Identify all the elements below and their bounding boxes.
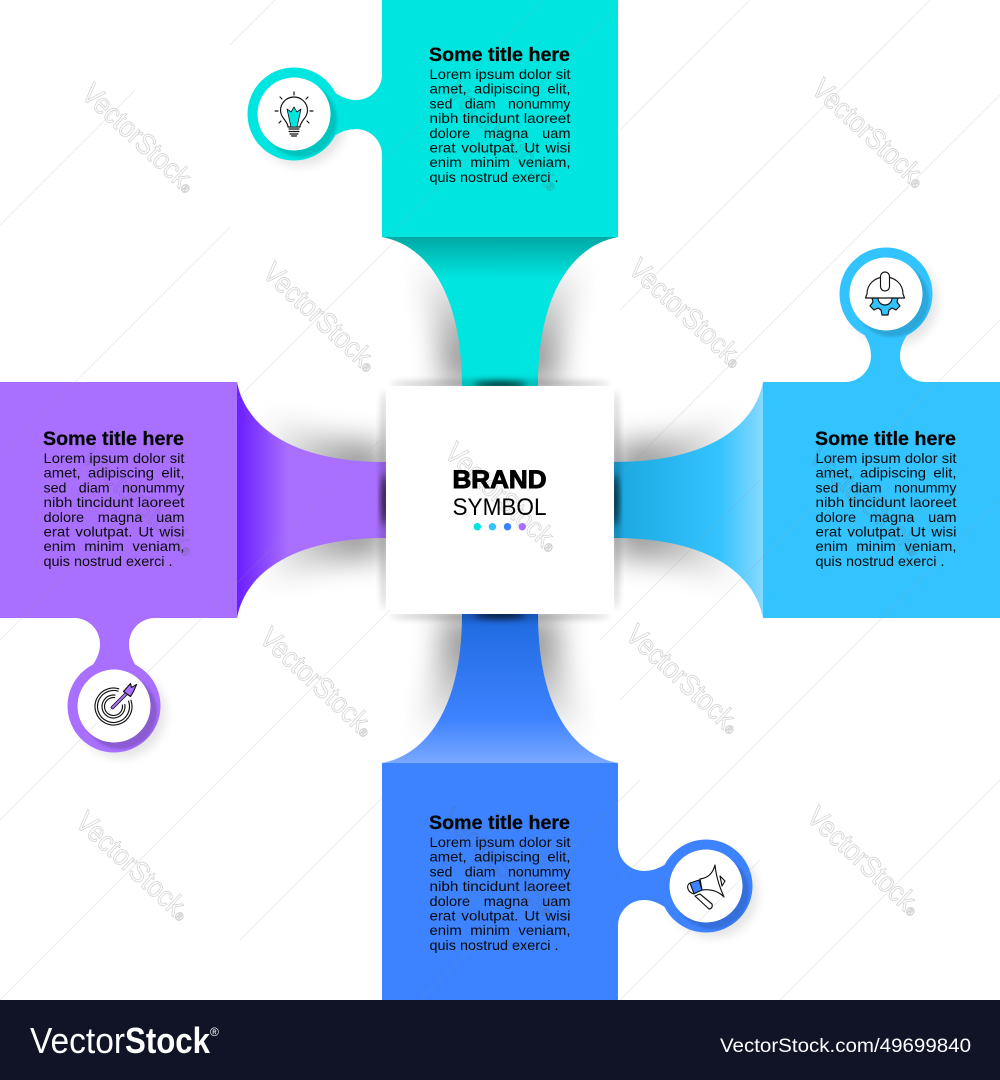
panel: left purple (0, 382, 386, 752)
text: right panel (815, 429, 957, 569)
watermark stamps on white: VectorStock® (800, 801, 927, 922)
footer bar: VectorStock.com/49699840 (720, 1036, 971, 1057)
text: bottom panel: nibh tincidunt laoreet (430, 879, 571, 894)
text: left panel: Some title here (43, 429, 184, 450)
text: left panel: erat volutpat. Ut wisi (44, 524, 184, 540)
text: right panel: Some title here (815, 429, 956, 450)
watermark stamps on white: VectorStock® (75, 78, 202, 199)
watermark stamps on panels: VectorStock® (440, 76, 567, 197)
text: top panel (429, 45, 571, 185)
icon: megaphone (670, 850, 749, 929)
brand symbol: BRAND (452, 466, 546, 494)
text: top panel: dolore magna uam (430, 126, 570, 141)
watermark stamps on panels: VectorStock® (75, 441, 202, 562)
icon: target with arrow (78, 670, 157, 749)
footer bar: Stock (125, 1020, 211, 1061)
watermark stamps on white: VectorStock® (253, 622, 380, 743)
footer bar: ® (210, 1025, 219, 1039)
icon: helmet and gear (850, 258, 929, 337)
footer bar (0, 1000, 1000, 1080)
watermark stamp on center square: VectorStock® (438, 437, 565, 558)
text: left panel (43, 429, 185, 569)
watermark stamps on white: VectorStock® (805, 73, 932, 194)
watermark stamps on white: VectorStock® (256, 257, 383, 378)
watermark stamps on white: VectorStock® (619, 619, 746, 740)
panel: right light blue (614, 248, 1000, 618)
text: bottom panel: Lorem ipsum dolor sit (430, 835, 571, 850)
circle soft shadows (76, 76, 938, 938)
text: left panel: amet, adipiscing elit, (44, 466, 184, 481)
text: bottom panel: sed diam nonummy (430, 864, 571, 880)
text: right panel: nibh tincidunt laoreet (816, 495, 957, 510)
text: right panel: quis nostrud exerci . (816, 554, 944, 569)
watermark stamps on white: VectorStock® (69, 806, 196, 927)
text: top panel: erat volutpat. Ut wisi (430, 140, 570, 156)
text: bottom panel: quis nostrud exerci . (430, 938, 558, 953)
text: top panel: sed diam nonummy (430, 96, 571, 112)
panel: top teal (248, 0, 618, 386)
text: left panel: enim minim veniam, (44, 539, 184, 554)
text: top panel: nibh tincidunt laoreet (430, 111, 571, 126)
brand symbol (452, 466, 546, 530)
text: left panel: Lorem ipsum dolor sit (44, 451, 185, 466)
panel: bottom blue (382, 614, 752, 1000)
text: bottom panel: dolore magna uam (430, 894, 570, 909)
center square shadows (380, 380, 620, 620)
text: right panel: erat volutpat. Ut wisi (816, 524, 956, 540)
text: right panel: dolore magna uam (816, 510, 956, 525)
brand symbol: SYMBOL (452, 494, 546, 521)
text: bottom panel: erat volutpat. Ut wisi (430, 908, 570, 924)
center square (386, 386, 614, 614)
watermark stamps on panels (75, 76, 929, 923)
text: bottom panel: amet, adipiscing elit, (430, 850, 570, 865)
text: bottom panel: enim minim veniam, (430, 923, 570, 938)
text: right panel: amet, adipiscing elit, (816, 466, 956, 481)
stem side shadows (255, 255, 745, 745)
text: right panel: sed diam nonummy (816, 480, 957, 496)
text: top panel: Lorem ipsum dolor sit (430, 67, 571, 82)
text: left panel: quis nostrud exerci . (44, 554, 172, 569)
text: top panel: Some title here (429, 45, 570, 66)
watermark stamps on white: VectorStock® (622, 253, 749, 374)
icon: light bulb (258, 78, 337, 157)
footer bar: Vector (30, 1020, 125, 1061)
text: right panel: enim minim veniam, (816, 539, 956, 554)
text: left panel: dolore magna uam (44, 510, 184, 525)
watermark stamps on white (69, 73, 932, 927)
watermark stamps on panels: VectorStock® (435, 802, 562, 923)
text: right panel: Lorem ipsum dolor sit (816, 451, 957, 466)
text: bottom panel (429, 813, 571, 953)
text: bottom panel: Some title here (429, 813, 570, 834)
text: top panel: quis nostrud exerci . (430, 170, 558, 185)
text: left panel: sed diam nonummy (44, 480, 185, 496)
text: left panel: nibh tincidunt laoreet (44, 495, 185, 510)
text: top panel: amet, adipiscing elit, (430, 82, 570, 97)
text: top panel: enim minim veniam, (430, 155, 570, 170)
watermark stamps on panels: VectorStock® (802, 441, 929, 562)
